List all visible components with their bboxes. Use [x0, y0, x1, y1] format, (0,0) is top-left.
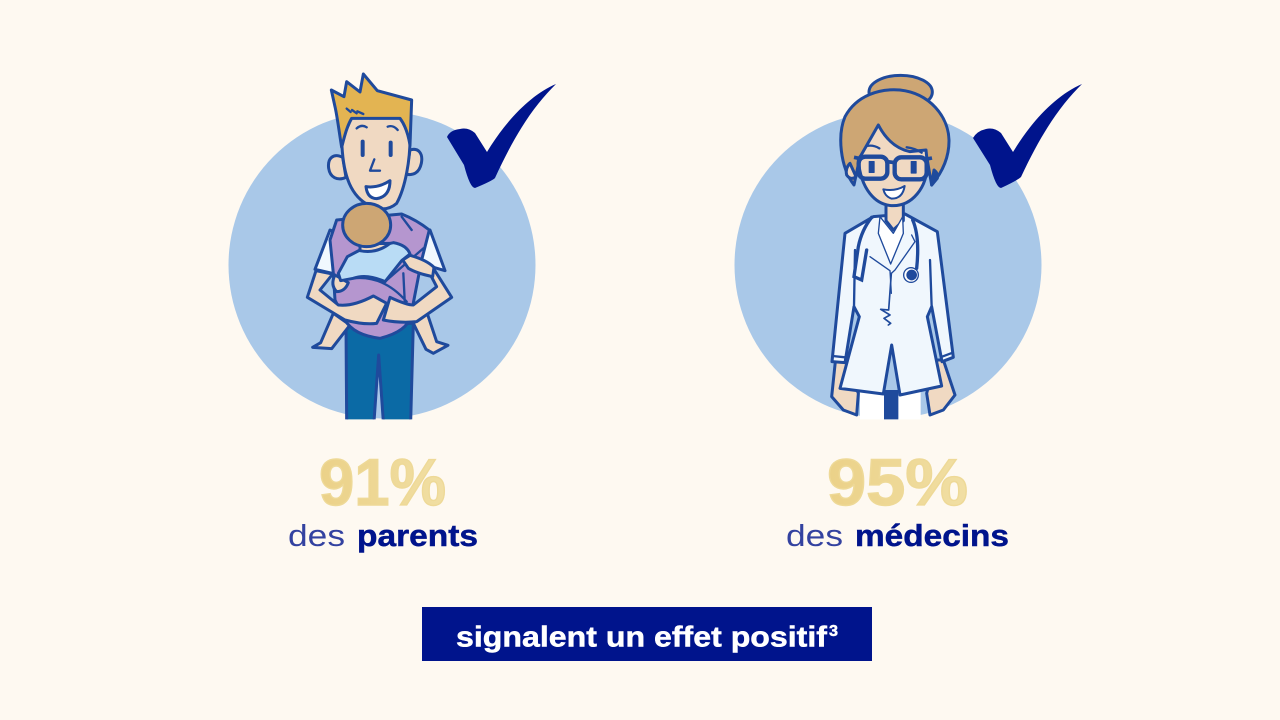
baby hand: [333, 275, 348, 292]
mouth: [883, 186, 905, 199]
trousers: [346, 323, 413, 422]
ears: [328, 149, 422, 179]
baby legs: [313, 312, 448, 353]
check mark: medecins: [973, 84, 1082, 188]
blue circle: medecins: [734, 112, 1042, 418]
banner text: signalent un effet positif: [456, 622, 827, 654]
mouth: [366, 181, 390, 199]
eyes: [869, 161, 875, 173]
hair: [841, 90, 949, 185]
trouser gap: [884, 390, 898, 422]
label: des parents: parents: [357, 518, 478, 553]
head: [342, 117, 410, 209]
ears: [846, 163, 856, 178]
stethoscope disc: [903, 267, 919, 283]
label: des medecins: [786, 518, 1009, 553]
eyes: [363, 142, 391, 155]
hair strands: [347, 109, 363, 114]
percentage: 95%: 95%: [827, 445, 968, 519]
sling folds: [353, 217, 423, 307]
baby head: [343, 203, 391, 247]
check mark: parents: [447, 84, 556, 188]
neck: [886, 202, 903, 230]
sleeve seams: [833, 250, 953, 357]
coat lapels: [870, 235, 915, 293]
banner background: [422, 607, 872, 661]
glasses: [859, 157, 887, 179]
banner text: 3: [829, 623, 838, 640]
trousers: [860, 392, 921, 420]
label: des medecins: médecins: [855, 518, 1009, 553]
baby neck: [360, 243, 390, 251]
baby arm: [403, 255, 434, 277]
arms: [307, 271, 387, 324]
coat: [832, 214, 953, 395]
blue circle: parents: [228, 112, 536, 418]
label: des parents: des: [288, 518, 345, 553]
eyebrows: [357, 126, 398, 130]
bun: [868, 74, 934, 100]
eyebrows: [867, 146, 922, 153]
hair: [331, 74, 412, 147]
hands: [832, 360, 955, 415]
label: des parents: [288, 518, 478, 553]
sling: [330, 214, 429, 338]
nose: [370, 159, 380, 171]
illustration: father carrying baby: [307, 74, 452, 422]
coat seam: [881, 273, 891, 325]
percentage: 91%: 91%: [319, 445, 446, 519]
stethoscope tube: [854, 217, 918, 280]
illustration: doctor: [832, 75, 955, 422]
shirt collar: [878, 217, 903, 264]
label: des medecins: des: [786, 518, 843, 553]
panel: parents: [228, 74, 556, 553]
face: [858, 125, 927, 206]
sleeves: [315, 230, 445, 274]
banner: signalent un effet positif: [422, 607, 872, 661]
baby shirt: [338, 243, 410, 282]
panel: medecins: [734, 75, 1082, 553]
